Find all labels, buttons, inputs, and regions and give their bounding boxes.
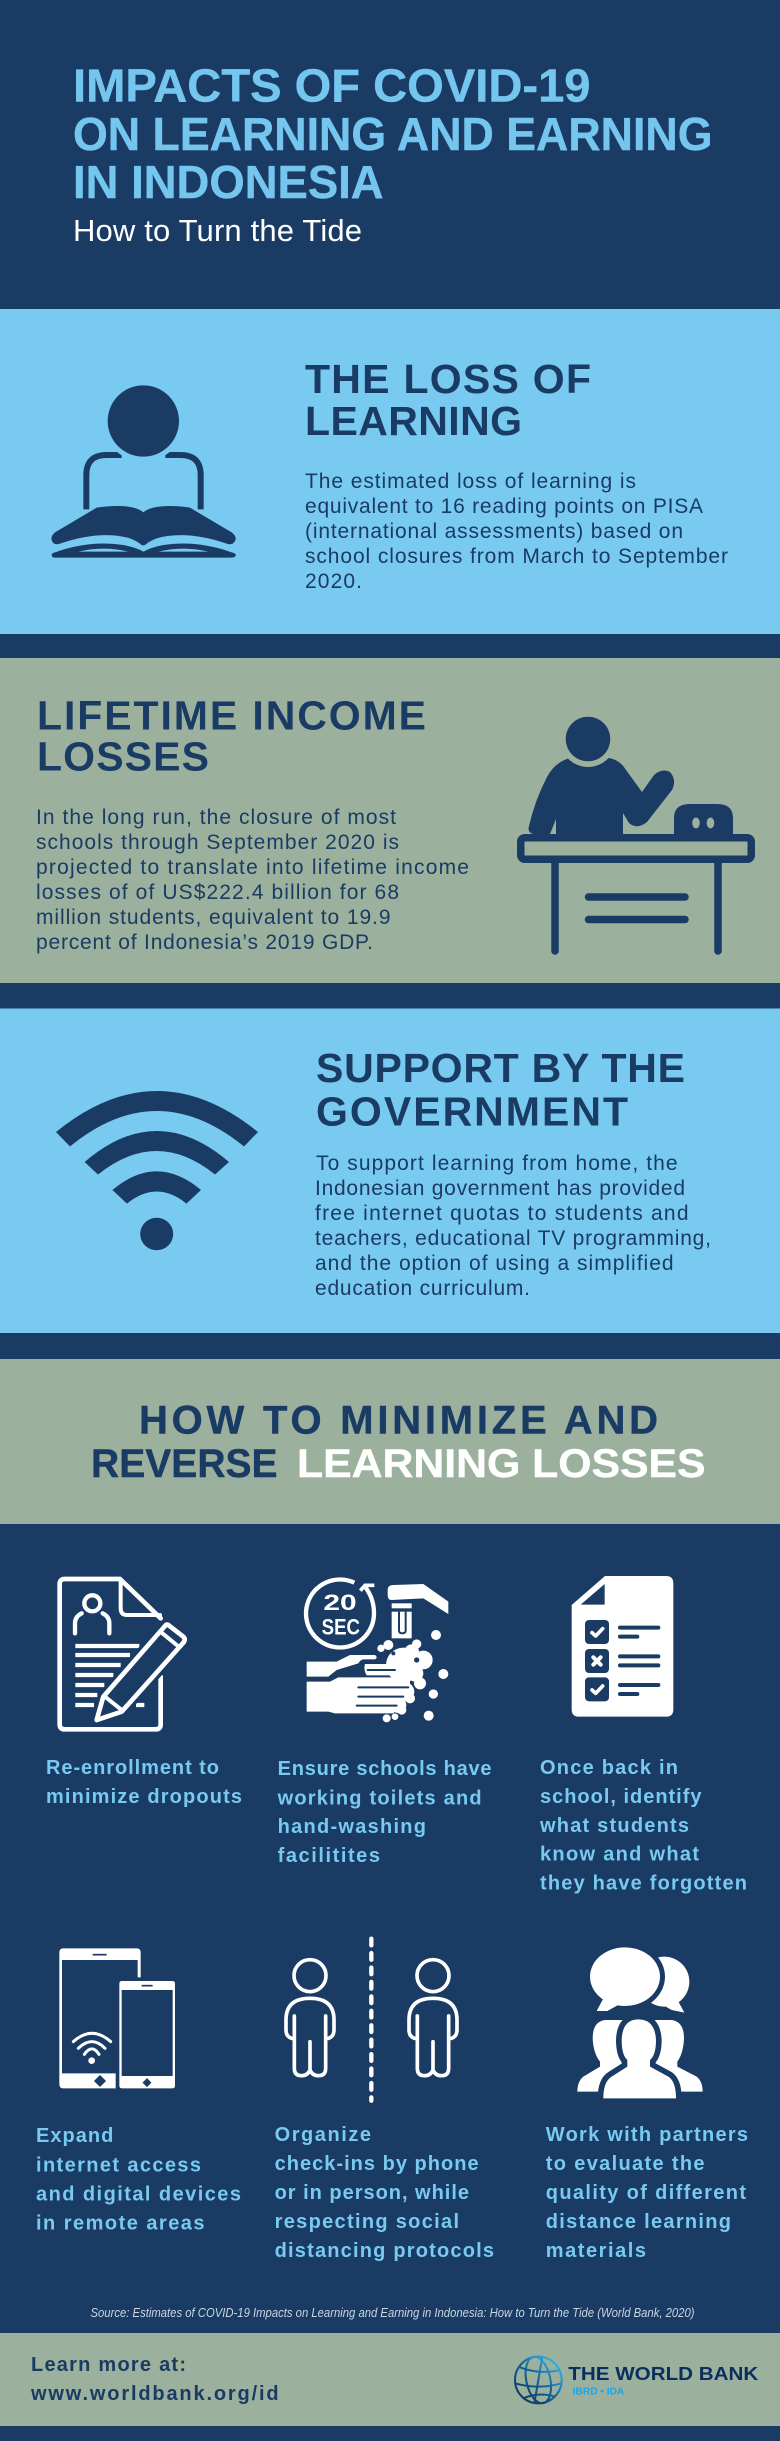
text: loss of learning body bbox=[305, 470, 728, 593]
sub-wordmark: IBRD • IDA bbox=[573, 2385, 625, 2397]
heading: how to minimize and reverse learning losses bbox=[91, 1398, 706, 1486]
heading: how to minimize and reverse learning losses: LEARNING LOSSES bbox=[297, 1442, 706, 1486]
icon: group with speech bubbles bbox=[577, 1942, 703, 2098]
item: organize check-ins bbox=[275, 1939, 494, 2262]
caption: Once back in bbox=[540, 1757, 678, 1779]
heading: lifetime income losses bbox=[37, 692, 426, 780]
item: toilets and hand-washing bbox=[277, 1579, 492, 1867]
icon: document and pencil bbox=[60, 1579, 185, 1729]
text: lifetime income body: schools through September 2020 is bbox=[36, 831, 399, 854]
title: IMPACTS OF COVID-19 bbox=[73, 60, 590, 112]
panel: support by the government bbox=[0, 1008, 780, 1333]
item: identify what students know bbox=[539, 1576, 747, 1895]
text: lifetime income body bbox=[36, 806, 469, 954]
text: lifetime income body: percent of Indonesia’s 2019 GDP. bbox=[36, 931, 373, 954]
item: work with partners bbox=[546, 1942, 748, 2262]
text: learn more link: Learn more at: bbox=[31, 2354, 186, 2376]
heading: lifetime income losses: LIFETIME INCOME bbox=[37, 692, 426, 738]
title: ON LEARNING AND EARNING bbox=[73, 108, 712, 160]
heading: the loss of learning: THE LOSS OF bbox=[305, 356, 591, 402]
title: IN INDONESIA bbox=[73, 156, 384, 208]
icon: teacher at desk bbox=[521, 711, 751, 951]
caption: to evaluate the bbox=[546, 2153, 704, 2175]
text: government support body: and the option of using a simplified bbox=[315, 1252, 674, 1275]
logo: the world bank bbox=[515, 2354, 759, 2406]
caption: Work with partners bbox=[546, 2124, 748, 2146]
text: loss of learning body: school closures from March to September bbox=[305, 545, 728, 568]
heading: the loss of learning: LEARNING bbox=[305, 398, 522, 444]
panel: footer bbox=[0, 2333, 780, 2426]
text: lifetime income body: million students, equivalent to 19.9 bbox=[36, 906, 390, 929]
panel: the loss of learning bbox=[0, 309, 780, 634]
text: lifetime income body: In the long run, the closure of most bbox=[36, 806, 396, 829]
icon: hand washing 20 seconds: 20 bbox=[323, 1590, 357, 1615]
wordmark: THE WORLD BANK bbox=[568, 2363, 759, 2384]
caption: quality of different bbox=[546, 2182, 746, 2204]
caption bbox=[277, 1758, 492, 1867]
text: government support body: teachers, educational TV programming, bbox=[315, 1227, 711, 1250]
caption: working toilets and bbox=[277, 1787, 482, 1809]
caption: minimize dropouts bbox=[46, 1786, 242, 1808]
caption: materials bbox=[546, 2240, 646, 2262]
heading: support by the government: GOVERNMENT bbox=[316, 1088, 628, 1134]
caption bbox=[46, 1757, 242, 1808]
caption bbox=[36, 2125, 241, 2234]
icon: checklist bbox=[572, 1576, 673, 1717]
caption: or in person, while bbox=[275, 2182, 469, 2204]
panel: lifetime income losses bbox=[0, 658, 780, 983]
caption bbox=[546, 2124, 748, 2262]
item: expand internet access bbox=[36, 1948, 241, 2234]
text: loss of learning body: The estimated loss of learning is bbox=[305, 470, 636, 493]
caption: Organize bbox=[275, 2124, 371, 2146]
title bbox=[73, 60, 712, 208]
caption: respecting social bbox=[275, 2211, 459, 2233]
caption: school, identify bbox=[540, 1786, 702, 1808]
icon: two people social distancing bbox=[286, 1939, 457, 2101]
icon: globe bbox=[515, 2354, 562, 2406]
text: loss of learning body: 2020. bbox=[305, 570, 362, 593]
caption: and digital devices bbox=[36, 2184, 241, 2206]
text: lifetime income body: losses of of US$222.4 billion for 68 bbox=[36, 881, 399, 904]
text: learn more link: www.worldbank.org/id bbox=[30, 2383, 279, 2405]
heading: how to minimize and reverse learning losses: REVERSE bbox=[91, 1442, 278, 1486]
icon: hand washing 20 seconds bbox=[305, 1579, 448, 1722]
caption: they have forgotten bbox=[540, 1873, 747, 1895]
text: loss of learning body: equivalent to 16 reading points on PISA bbox=[305, 495, 703, 518]
caption: what students bbox=[539, 1815, 689, 1837]
text: government support body: education curriculum. bbox=[315, 1277, 530, 1300]
caption: check-ins by phone bbox=[275, 2153, 479, 2175]
caption: internet access bbox=[36, 2155, 201, 2177]
caption: Ensure schools have bbox=[278, 1758, 492, 1780]
heading: support by the government: SUPPORT BY THE bbox=[316, 1045, 685, 1091]
text: government support body: Indonesian government has provided bbox=[315, 1177, 685, 1200]
item: re-enrollment bbox=[46, 1579, 242, 1808]
caption bbox=[275, 2124, 494, 2262]
source note: Source: Estimates of COVID-19 Impacts on Learning and Earning in Indonesia: How to Turn the Tide (World Bank, 2020) bbox=[90, 2305, 694, 2320]
panel: how to minimize heading band bbox=[0, 1359, 780, 1524]
text: government support body bbox=[315, 1152, 711, 1300]
subtitle: How to Turn the Tide bbox=[73, 213, 362, 248]
caption: in remote areas bbox=[36, 2212, 204, 2234]
caption bbox=[539, 1757, 747, 1895]
icon: wifi signal bbox=[56, 1091, 258, 1250]
caption: facilitites bbox=[278, 1845, 380, 1867]
caption: Expand bbox=[36, 2125, 113, 2147]
text: government support body: To support learning from home, the bbox=[316, 1152, 678, 1175]
icon: phones with wifi bbox=[59, 1948, 175, 2088]
icon: person reading book bbox=[51, 380, 236, 558]
caption: know and what bbox=[540, 1844, 699, 1866]
caption: distance learning bbox=[546, 2211, 731, 2233]
caption: distancing protocols bbox=[275, 2240, 494, 2262]
icon: hand washing 20 seconds: SEC bbox=[322, 1614, 360, 1639]
caption: Re-enrollment to bbox=[46, 1757, 219, 1779]
heading: how to minimize and reverse learning losses: HOW TO MINIMIZE AND bbox=[139, 1398, 658, 1442]
heading: the loss of learning bbox=[305, 356, 591, 444]
text: lifetime income body: projected to translate into lifetime income bbox=[36, 856, 469, 879]
text: loss of learning body: (international assessments) based on bbox=[305, 520, 683, 543]
caption: hand-washing bbox=[278, 1816, 426, 1838]
heading: lifetime income losses: LOSSES bbox=[37, 734, 209, 780]
text: government support body: free internet quotas to students and bbox=[315, 1202, 688, 1225]
header: title block bbox=[73, 60, 712, 248]
heading: support by the government bbox=[316, 1045, 685, 1134]
text: learn more link bbox=[30, 2354, 279, 2405]
